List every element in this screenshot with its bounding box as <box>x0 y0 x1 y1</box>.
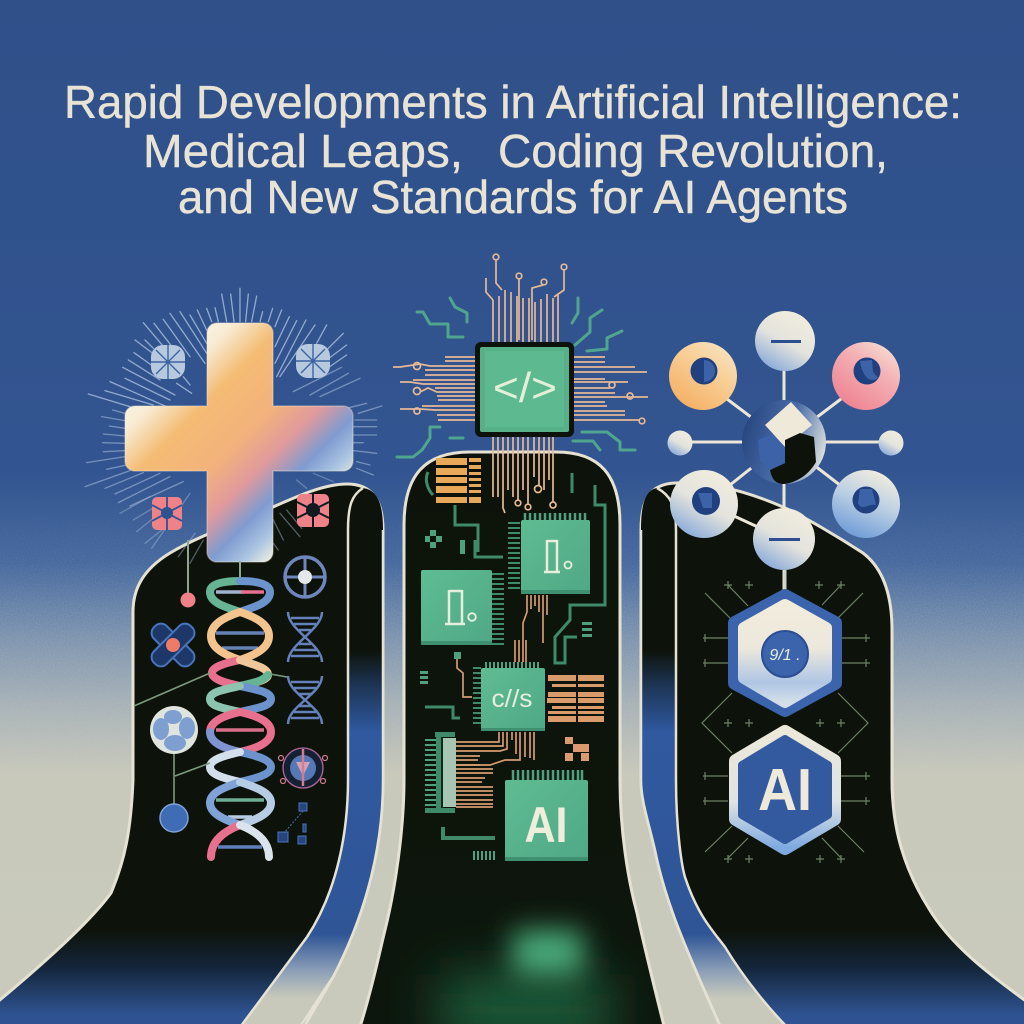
node: orange <box>669 342 737 410</box>
icon: AI chip: AI <box>524 797 568 853</box>
connectors: helix lines <box>134 673 287 805</box>
icon: small blue squares <box>278 803 307 844</box>
title: Coding Revolution, <box>498 125 888 177</box>
icon: code chip centre <box>473 662 545 731</box>
icon: green squiggles <box>397 298 635 457</box>
chart: DNA double helix <box>210 562 271 857</box>
icon: molecule bug <box>278 748 328 788</box>
icon: blue ball <box>160 804 188 832</box>
node: small left <box>668 430 692 456</box>
icon: code chip centre: c//s <box>492 685 532 713</box>
icon: main traces <box>393 254 648 513</box>
icon: green pixel marks <box>420 530 592 860</box>
icon: code chip: </> <box>493 364 557 411</box>
icon: orange memory block <box>436 458 481 503</box>
circuit: agent thin lines <box>702 581 870 863</box>
icon: hexagon badge with code: 9/1 . <box>769 647 801 664</box>
node: pink <box>832 342 900 410</box>
band: agents side stripe <box>641 488 790 1024</box>
title: Rapid Developments in Artificial Intelligence: <box>64 76 962 128</box>
icon: medical cross <box>125 323 353 562</box>
background gradient <box>0 478 1024 1024</box>
node: bottom <box>753 508 815 570</box>
icon: pink node <box>180 540 196 608</box>
icon: agent network <box>668 311 904 590</box>
node: small right <box>878 430 904 456</box>
icon: chip upper right <box>508 513 590 594</box>
title <box>64 76 962 223</box>
title: and New Standards for AI Agents <box>178 171 848 223</box>
panel: coding <box>359 452 665 1024</box>
icon: AI chip <box>505 770 588 861</box>
icon: connector block <box>425 732 456 813</box>
icon: rosette pink right <box>297 494 329 527</box>
panel: agents <box>641 483 1024 1024</box>
icon: hexagon badge with code <box>735 570 835 710</box>
circuit traces: copper between chips <box>456 595 547 807</box>
icon: medical rays <box>85 288 382 563</box>
icon: rosette top right <box>296 344 330 378</box>
icon: orange checker <box>565 737 589 761</box>
circuit traces: green board lines <box>425 472 605 838</box>
icon: X bandage <box>148 620 198 670</box>
glow: green floor reflection <box>440 930 610 1024</box>
node: lower right <box>832 470 900 538</box>
icon: small DNA one <box>288 612 322 662</box>
title: Medical Leaps, <box>143 125 463 177</box>
icon: rosette top left <box>151 345 185 379</box>
icon: orange block right <box>547 675 604 722</box>
icon: code chip <box>475 342 574 437</box>
icon: small DNA two <box>288 676 322 724</box>
icon: chip left <box>421 570 504 645</box>
icon: rosette pink left <box>152 497 182 530</box>
icon: cell sphere <box>150 706 198 754</box>
panel: medical <box>0 484 383 1024</box>
node: lower left <box>670 470 738 538</box>
icon: target <box>285 557 325 597</box>
node: top <box>755 311 815 371</box>
spokes <box>692 371 879 590</box>
icon: small pad <box>454 652 461 659</box>
node: central hub <box>742 400 826 484</box>
icon: hexagon AI badge <box>736 732 834 848</box>
icon: hexagon AI badge: AI <box>758 757 812 823</box>
band: medical side stripe <box>238 488 383 1024</box>
